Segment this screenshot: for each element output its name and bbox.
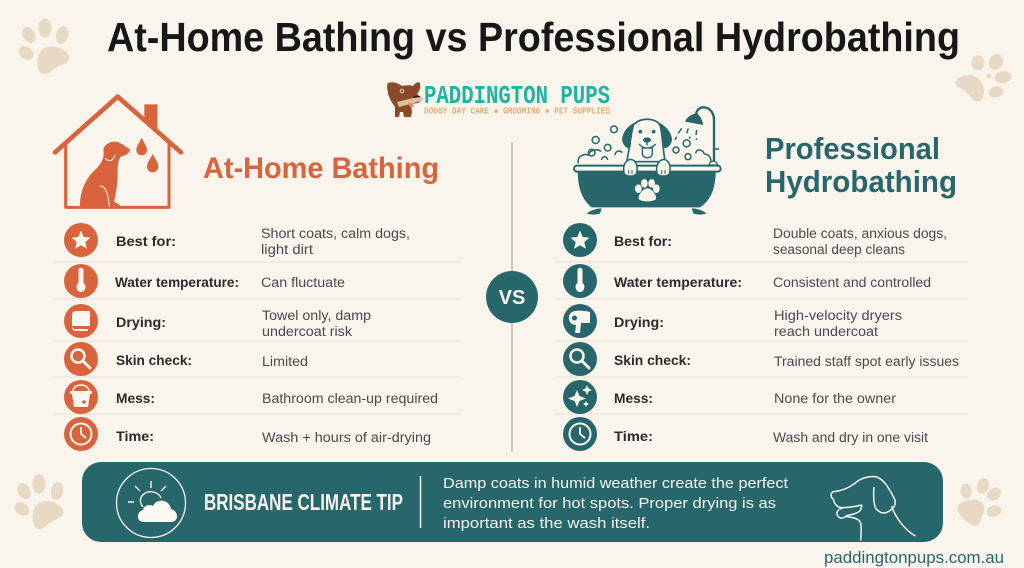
- row: time: Time:: [614, 428, 653, 444]
- row: skin check: Skin check:: [116, 352, 192, 368]
- icon: dog outline: [831, 477, 915, 540]
- row: mess: Mess:: [614, 390, 653, 406]
- callout heading: BRISBANE CLIMATE TIP: [204, 489, 403, 515]
- VS badge: VS: [499, 287, 525, 309]
- tub: [578, 171, 716, 207]
- row: best for: light dirt: [261, 242, 313, 257]
- row: best for: [64, 223, 410, 257]
- row: skin check: Trained staff spot early issues: [774, 354, 959, 369]
- row: skin check: [563, 342, 959, 376]
- title: At-Home Bathing vs Professional Hydrobathing: [107, 14, 960, 60]
- row: time: Wash + hours of air-drying: [262, 430, 431, 445]
- logo: Paddington Pups: [387, 81, 611, 117]
- row: water temperature: Water temperature:: [614, 274, 742, 290]
- centre divider: [511, 142, 513, 452]
- row: mess: [64, 380, 438, 414]
- dog head: [627, 119, 665, 162]
- row: water temperature: Can fluctuate: [261, 275, 345, 290]
- panel: at-home comparison table: [55, 223, 461, 451]
- row: drying: Towel only, damp: [262, 308, 371, 323]
- heading: At-Home Bathing: At-Home Bathing: [203, 152, 439, 185]
- row: best for: Best for:: [116, 233, 176, 249]
- paw print top right: [956, 52, 1012, 102]
- VS badge: [486, 271, 538, 323]
- row: drying: undercoat risk: [262, 324, 352, 339]
- callout text: Damp coats in humid weather create the perfect: [443, 475, 789, 492]
- row: water temperature: Consistent and controlled: [773, 275, 931, 290]
- row: mess: [563, 380, 897, 414]
- row: best for: seasonal deep cleans: [773, 242, 905, 257]
- heading: Professional Hydrobathing: [765, 131, 957, 199]
- paw print bottom right: [957, 477, 1004, 526]
- row: drying: Drying:: [116, 314, 166, 330]
- row: drying: High-velocity dryers: [774, 308, 902, 323]
- row: water temperature: Water temperature:: [115, 274, 239, 290]
- heading: Professional Hydrobathing: Hydrobathing: [765, 164, 957, 199]
- row: skin check: Limited: [262, 354, 308, 369]
- row: best for: Double coats, anxious dogs,: [773, 226, 947, 241]
- row: skin check: Skin check:: [614, 352, 691, 368]
- row: time: Time:: [116, 428, 154, 444]
- callout: Brisbane climate tip: [82, 462, 943, 542]
- row: time: [563, 417, 928, 451]
- row: drying: [64, 304, 371, 339]
- paw print bottom left: [12, 474, 64, 529]
- icon: sun and cloud: [116, 468, 186, 538]
- paws on rim: [624, 159, 670, 176]
- callout text: environment for hot spots. Proper drying is as: [443, 495, 776, 512]
- row: water temperature: [563, 264, 931, 298]
- row: best for: [563, 223, 947, 257]
- row: mess: None for the owner: [774, 391, 897, 406]
- logo tagline: DOGGY DAY CARE ✹ GROOMING ✹ PET SUPPLIES: [424, 106, 611, 116]
- heading: Professional Hydrobathing: Professional: [765, 131, 940, 166]
- row: water temperature: [64, 264, 345, 298]
- paw print top left: [16, 18, 70, 74]
- row: mess: Mess:: [116, 390, 155, 406]
- callout text: important as the wash itself.: [443, 515, 650, 532]
- callout text: [443, 475, 789, 532]
- row: drying: reach undercoat: [774, 324, 878, 339]
- row: time: Wash and dry in one visit: [773, 430, 928, 445]
- logo name: PADDINGTON PUPS: [424, 81, 610, 111]
- row: skin check: [64, 342, 308, 376]
- icon: house with dog and water drops: [55, 97, 181, 207]
- row: best for: Short coats, calm dogs,: [261, 226, 410, 241]
- website url: paddingtonpups.com.au: [824, 548, 1004, 567]
- logo dog mascot: [387, 82, 423, 117]
- row: best for: Best for:: [614, 233, 672, 249]
- row: time: [64, 417, 431, 451]
- row: drying: Drying:: [614, 314, 664, 330]
- icon: dog in bathtub with shower: [574, 107, 721, 215]
- tub paw: [635, 179, 660, 201]
- row: mess: Bathroom clean-up required: [262, 391, 438, 406]
- row: drying: [563, 304, 902, 339]
- panel: professional comparison table: [555, 223, 968, 451]
